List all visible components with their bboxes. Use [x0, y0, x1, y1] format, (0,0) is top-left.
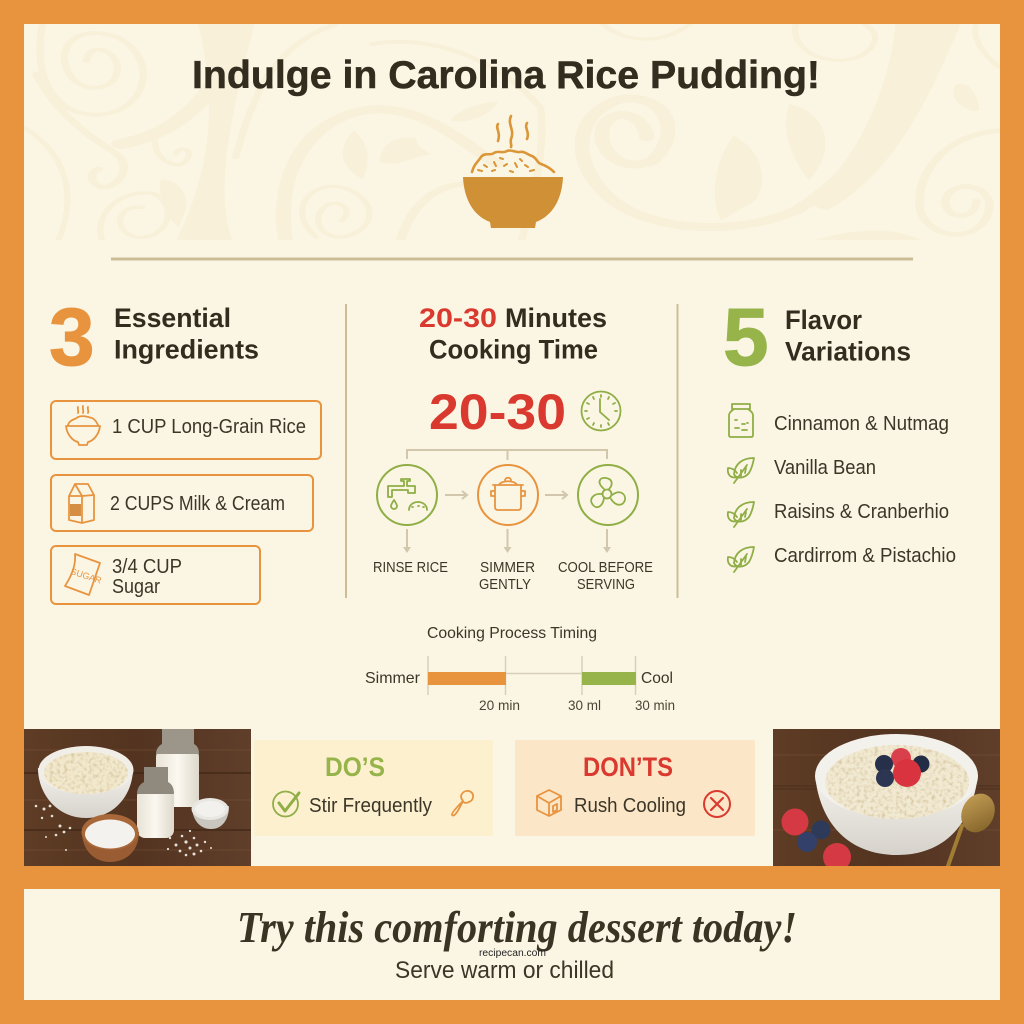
ingredient card: sugar — [51, 546, 260, 604]
icon: box — [537, 790, 561, 816]
heading: essential ingredients — [114, 303, 259, 364]
arrows down to labels — [403, 529, 611, 553]
don'ts item: Rush Cooling — [574, 795, 686, 817]
flavor: raisins and cranberries: Raisins & Cranberhio — [774, 501, 949, 523]
flavor: vanilla bean: Vanilla Bean — [774, 457, 876, 479]
ingredient card: sugar: 3/4 CUP — [112, 556, 182, 578]
heading: cooking time: Cooking Time — [429, 334, 598, 364]
heading: cooking time — [419, 303, 607, 364]
tick label 20 min: 20 min — [479, 697, 520, 713]
icon: steaming rice bowl — [463, 116, 563, 228]
watermark: recipecan.com — [479, 948, 546, 959]
don'ts heading: DON’TS — [583, 752, 673, 782]
step label: cool before serving: SERVING — [577, 576, 635, 593]
heading: cooking time: Minutes — [505, 303, 607, 333]
flavor: vanilla bean — [728, 457, 876, 483]
flavor: cardamom and pistachio — [728, 545, 956, 572]
heading: flavor variations: Flavor — [785, 305, 862, 335]
tick label 30 ml: 30 ml — [568, 697, 601, 713]
icon: cross in circle — [704, 791, 730, 817]
icon: clock — [582, 392, 620, 430]
panel: don'ts — [515, 740, 755, 836]
step label: cool before serving: COOL BEFORE — [558, 559, 653, 576]
chart ticks and track — [428, 656, 636, 695]
heading: flavor variations: Variations — [785, 336, 911, 366]
title: Indulge in Carolina Rice Pudding! — [192, 54, 820, 97]
bar: cool — [582, 672, 636, 685]
panel: do's — [254, 740, 493, 836]
subline: Serve warm or chilled — [395, 957, 614, 984]
heading: cooking time: 20-30 — [419, 303, 497, 333]
panel: cooking time — [373, 303, 653, 593]
ingredient card: milk — [51, 475, 313, 531]
bar: simmer — [428, 672, 506, 685]
step label: cool before serving — [558, 559, 653, 593]
column divider left — [345, 304, 347, 598]
tick label 30 min: 30 min — [635, 697, 675, 713]
step label: simmer gently: SIMMER — [480, 559, 535, 576]
heading: flavor variations — [785, 305, 911, 366]
big time figure: 20-30 — [429, 384, 566, 440]
ingredient card: sugar: Sugar — [112, 576, 160, 598]
step label: simmer gently: GENTLY — [479, 576, 531, 593]
icon: spoon — [452, 791, 473, 816]
decorative swirl background — [24, 24, 1000, 240]
panel: flavor variations — [723, 292, 956, 572]
big number 5: 5 — [723, 292, 769, 383]
flavor: raisins and cranberries — [728, 501, 949, 527]
big number 3: 3 — [49, 292, 95, 383]
do's item: Stir Frequently — [309, 795, 432, 817]
do's heading: DO’S — [325, 752, 385, 782]
arrow: step 2 to 3 — [545, 491, 567, 499]
flavor: cinnamon and nutmeg — [729, 404, 949, 437]
label: cool: Cool — [641, 670, 673, 687]
column divider right — [676, 304, 678, 598]
ingredient card: rice — [51, 401, 321, 459]
step 3 icon: cooling fan — [578, 465, 638, 525]
label: simmer: Simmer — [365, 670, 421, 687]
heading: essential ingredients: Essential — [114, 303, 231, 333]
chart: cooking process timing — [365, 625, 675, 713]
flavor: cardamom and pistachio: Cardirrom & Pistachio — [774, 545, 956, 567]
process connector — [407, 450, 607, 460]
icon: check mark — [273, 792, 299, 816]
panel: essential ingredients — [49, 292, 321, 604]
ingredient card: sugar: SUGAR — [69, 566, 103, 586]
photo: finished rice pudding with berries — [773, 729, 1001, 871]
heading: essential ingredients: Ingredients — [114, 334, 259, 364]
call to action: Try this comforting dessert today! — [237, 903, 797, 952]
flavor: cinnamon and nutmeg: Cinnamon & Nutmag — [774, 413, 949, 435]
step 2 icon: simmer pot — [478, 465, 538, 525]
step 1 icon: rinse rice — [377, 465, 437, 525]
arrow: step 1 to 2 — [445, 491, 467, 499]
photo: ingredients on wood table — [24, 729, 251, 866]
ingredient card: milk: 2 CUPS Milk & Cream — [110, 493, 285, 515]
chart title: Cooking Process Timing — [427, 625, 597, 642]
step label: rinse rice: RINSE RICE — [373, 559, 448, 576]
footer panel — [24, 889, 1000, 1000]
main cream panel — [24, 24, 1000, 866]
step label: simmer gently — [479, 559, 535, 593]
header rule — [111, 258, 913, 260]
ingredient card: rice: 1 CUP Long-Grain Rice — [112, 416, 306, 438]
